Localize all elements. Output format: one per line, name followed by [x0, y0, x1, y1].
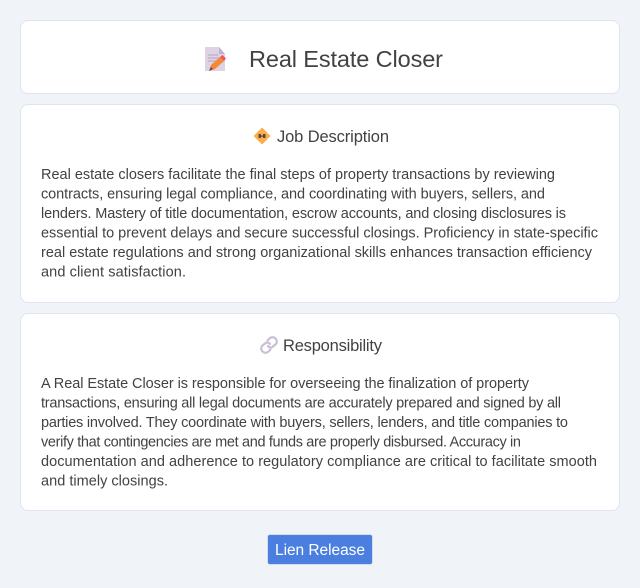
- icon: chain link: [260, 336, 278, 354]
- button: lien release: [267, 534, 373, 565]
- text block: job description: and client satisfaction.: [41, 264, 186, 280]
- heading: responsibility: Responsibility: [283, 336, 383, 354]
- text block: responsibility: A Real Estate Closer is responsible for overseeing the finalization of property: [41, 376, 530, 392]
- text block: responsibility: parties involved. They coordinate with buyers, sellers, lenders, and title companies to: [41, 414, 568, 430]
- text block: responsibility: [41, 376, 597, 489]
- heading: job description: Job Description: [277, 128, 389, 146]
- text block: job description: contracts, ensuring legal compliance, and coordinating with buyers, sellers, and: [41, 186, 545, 202]
- text block: responsibility: documentation and adherence to regulatory compliance are critical to facilitate smooth: [41, 454, 597, 470]
- panel: responsibility: [20, 313, 620, 511]
- text block: responsibility: verify that contingencies are met and funds are properly disbursed. Accuracy in: [41, 434, 521, 450]
- icon: road sign diamond: [254, 128, 270, 144]
- text block: responsibility: transactions, ensuring all legal documents are accurately prepared and signed by all: [41, 395, 561, 411]
- panel: title card: [20, 20, 620, 94]
- text block: job description: [41, 166, 598, 280]
- text block: job description: essential to prevent delays and secure successful closings. Proficiency in state-specific: [41, 225, 598, 241]
- button label: Lien Release: [275, 542, 365, 559]
- text block: job description: real estate regulations and strong organizational skills enhances transaction efficiency: [41, 244, 593, 260]
- text block: job description: Real estate closers facilitate the final steps of property transactions by reviewing: [41, 166, 555, 182]
- text block: responsibility: and timely closings.: [41, 473, 168, 489]
- text block: job description: lenders. Mastery of title documentation, escrow accounts, and closing disclosures is: [41, 206, 566, 222]
- icon: document with pencil: [205, 47, 226, 71]
- panel: job description: [20, 104, 620, 303]
- title: Real Estate Closer: [249, 46, 443, 72]
